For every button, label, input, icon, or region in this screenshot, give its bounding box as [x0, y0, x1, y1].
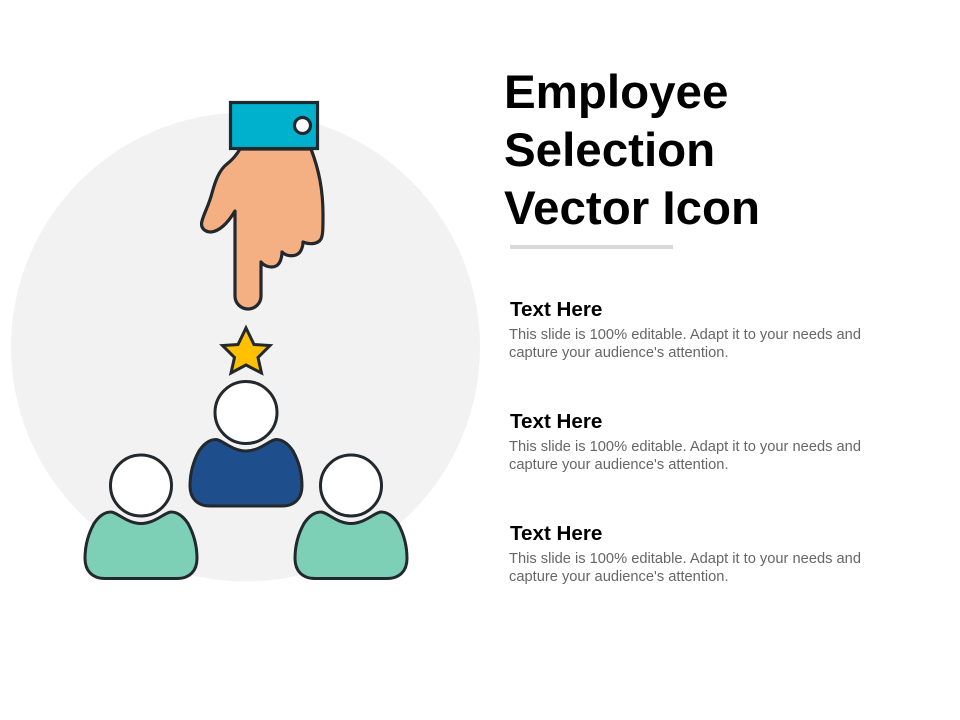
description 1: [509, 327, 861, 361]
heading 2: Text Here: [510, 410, 602, 433]
heading 3: Text Here: [510, 522, 602, 545]
description 3: This slide is 100% editable. Adapt it to your needs and: [509, 551, 861, 567]
description 2: capture your audience's attention.: [509, 457, 729, 473]
person: right employee: [295, 455, 407, 578]
description 3: capture your audience's attention.: [509, 569, 729, 585]
heading 1: Text Here: [510, 298, 602, 321]
text block 1: [509, 298, 861, 361]
icon: pointing hand: [202, 149, 323, 309]
description 3: [509, 551, 861, 585]
text block 3: [509, 522, 861, 585]
background circle: [11, 112, 480, 582]
icon: star: [222, 328, 270, 373]
description 1: This slide is 100% editable. Adapt it to your needs and: [509, 327, 861, 343]
text block 2: [509, 410, 861, 473]
title: Selection: [504, 124, 715, 177]
title: Employee: [504, 66, 728, 119]
icon: cuff button: [294, 118, 310, 134]
description 2: [509, 439, 861, 473]
title: [504, 66, 760, 235]
person: centre selected employee: [190, 382, 302, 506]
icon: shirt cuff: [230, 102, 318, 148]
description 1: capture your audience's attention.: [509, 345, 729, 361]
description 2: This slide is 100% editable. Adapt it to your needs and: [509, 439, 861, 455]
person: left employee: [85, 455, 197, 578]
title: Vector Icon: [504, 182, 760, 235]
